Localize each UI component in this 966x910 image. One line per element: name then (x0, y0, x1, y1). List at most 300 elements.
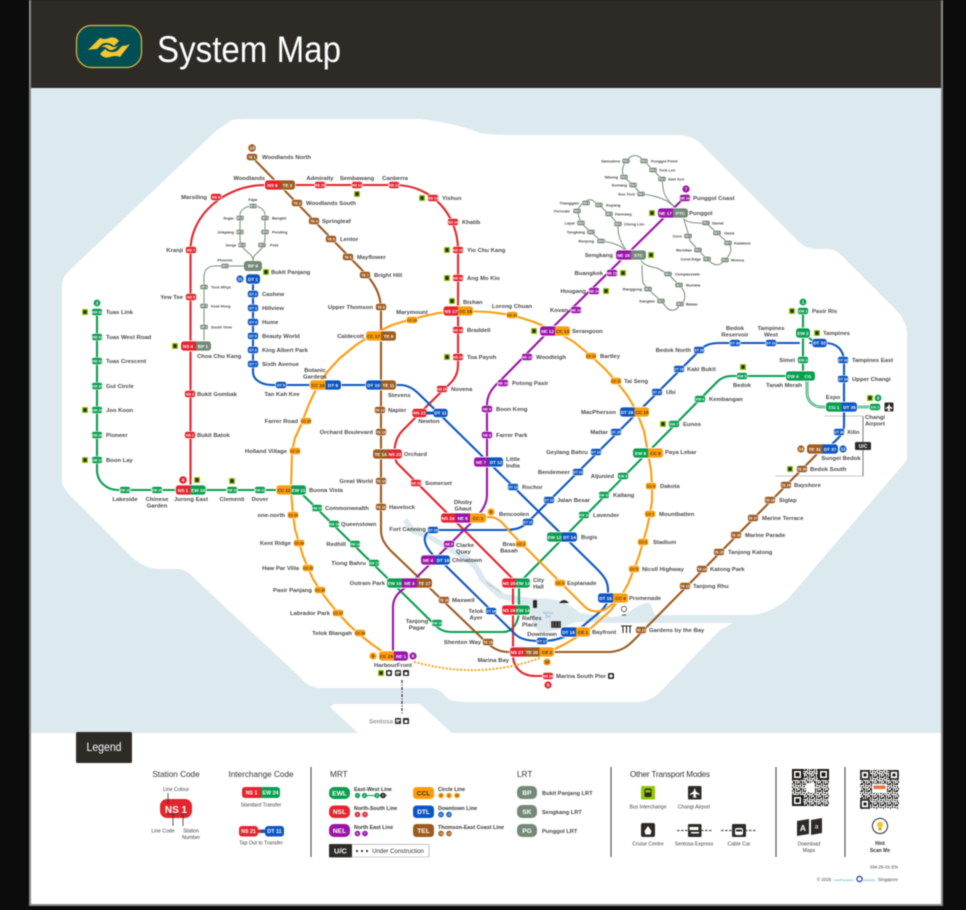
Newton: Newton (418, 419, 440, 425)
Raffles Place: NS 26 (503, 608, 516, 613)
Changi Airport: Airport (865, 421, 885, 427)
Tampines (795, 328, 851, 338)
Woodlands South: Woodlands South (306, 201, 356, 207)
Interchange Code legend: Interchange Code (228, 770, 294, 779)
Gul Circle: EW 30 (92, 384, 102, 388)
Tuas Crescent (92, 358, 146, 365)
Punggol LRT stations: PE 5 (725, 242, 731, 245)
NS stations group (160, 176, 614, 680)
Sungei Bedok: TE 31 (809, 447, 821, 452)
Bedok Reservoir (721, 326, 749, 346)
Tanah Merah (766, 370, 816, 389)
Stevens: TE 11 (382, 383, 395, 388)
NEL entry (329, 824, 393, 837)
Bukit Panjang LRT stations: Teck Whye (211, 284, 232, 290)
NSL entry: 5 (364, 813, 366, 817)
Sengkang: NE 16 (617, 253, 630, 258)
QR code: hint (860, 770, 899, 809)
Bedok Reservoir: Bedok (726, 326, 744, 332)
Lakeside (112, 486, 138, 503)
badge CCL 9 (369, 652, 377, 660)
Bukit Panjang LRT stations: BP 7 (259, 244, 265, 247)
Bukit Panjang (245, 269, 311, 284)
copyright line: LandTransport (834, 878, 854, 882)
Boon Keng: NE 9 (483, 407, 491, 411)
Katong Park: TE 24 (697, 567, 707, 571)
Bendemeer: Bendemeer (538, 470, 571, 476)
Punggol LRT stations: Oasis (724, 230, 735, 236)
Xilin: DT 36 (834, 430, 844, 434)
Sengkang LRT stations: Compassvale (675, 272, 701, 276)
Marsiling: NS 8 (212, 195, 220, 199)
Telok Ayer: Ayer (470, 616, 483, 622)
Bedok South: Bedok South (810, 467, 847, 473)
Farrer Park (482, 432, 528, 439)
landmark: Gardens by the Bay (621, 626, 632, 633)
Bayshore: TE 29 (781, 483, 791, 487)
Marina Bay: TE 20 (526, 650, 539, 655)
Outram Park (350, 578, 433, 588)
Marina Bay: NS 27 (511, 650, 524, 655)
Hillview: Hillview (262, 306, 284, 312)
Yishun: Yishun (442, 196, 462, 202)
Clementi: EW 23 (227, 488, 237, 492)
Lorong Chuan: Lorong Chuan (492, 304, 533, 310)
Bukit Panjang LRT stations: BP 3 (201, 305, 207, 308)
Tuas Link: EW 33 (92, 310, 102, 314)
Farrer Road: Farrer Road (265, 419, 298, 425)
Lentor: Lentor (340, 237, 359, 243)
Bishan: CC 15 (459, 309, 472, 314)
Braddell (452, 326, 491, 334)
Potong Pasir (498, 380, 549, 387)
Redhill: Redhill (326, 542, 346, 548)
Geylang Bahru: Geylang Bahru (546, 450, 588, 456)
Sengkang LRT line (577, 200, 685, 310)
Holland Village: CC 21 (290, 449, 300, 453)
Bedok South: TE 30 (797, 467, 807, 471)
Sengkang: STC (634, 253, 644, 258)
Bright Hill: Bright Hill (374, 273, 403, 279)
Redhill (326, 540, 360, 548)
Commonwealth: Commonwealth (325, 506, 369, 512)
Sengkang LRT stations: SE 2 (676, 284, 682, 287)
Expo (825, 395, 858, 412)
Sentosa label and icons: Sentosa (369, 718, 394, 726)
Marina South Pier: NS 28 (543, 674, 553, 678)
Farrer Road (265, 418, 312, 425)
Pasir Panjang: Pasir Panjang (273, 588, 312, 594)
Gardens by the Bay: TE 22 (636, 628, 646, 632)
badge NSL 5: 5 (547, 683, 550, 688)
Mattar (590, 428, 622, 436)
icon and label: Download Maps: A (800, 823, 806, 833)
Punggol LRT stations: PE 1 (685, 235, 691, 238)
Serangoon (531, 326, 603, 336)
Promenade: CC 4 (615, 596, 626, 601)
Stadium: Stadium (653, 540, 676, 546)
Boon Keng: Boon Keng (496, 407, 528, 413)
Somerset: NS 23 (411, 481, 421, 485)
badge TEL 14: 14 (798, 447, 804, 452)
Redhill: EW 18 (350, 542, 360, 546)
PG entry (517, 824, 578, 837)
Kovan: NE 13 (571, 308, 581, 312)
Paya Lebar: Paya Lebar (665, 450, 697, 456)
Dover: Dover (252, 497, 269, 503)
Woodlands: NS 9 (267, 183, 278, 188)
Great World (339, 478, 386, 485)
Tiong Bahru (331, 560, 380, 567)
Sungei Bedok: Sungei Bedok (821, 456, 861, 462)
Sungei Bedok (806, 444, 861, 462)
Bukit Batok: Bukit Batok (197, 433, 230, 439)
SK entry (517, 805, 582, 818)
Bukit Panjang LRT stations: BP 12 (237, 231, 244, 234)
Dhoby Ghaut: Dhoby (454, 500, 472, 506)
Kaki Bukit: Kaki Bukit (687, 367, 716, 373)
Yio Chu Kang: Yio Chu Kang (467, 248, 506, 254)
Upper Thomson: Upper Thomson (328, 305, 373, 311)
copyright line: Singapore (878, 877, 899, 882)
Great World: TE 15 (376, 479, 386, 483)
Bugis: EW 12 (548, 535, 562, 540)
Chinatown: Chinatown (452, 558, 483, 564)
Marine Terrace: Marine Terrace (762, 516, 804, 522)
Tan Kah Kee: Tan Kah Kee (264, 392, 300, 398)
Esplanade: CC 3 (556, 581, 564, 585)
Bukit Panjang LRT stations: BP 11 (237, 217, 244, 220)
Ubi (652, 388, 676, 396)
copyright line: Authority (863, 878, 876, 882)
Nicoll Highway: CC 5 (630, 567, 638, 571)
Under Construction entry (329, 844, 429, 857)
Buona Vista (276, 484, 344, 496)
Napier: TE 12 (375, 408, 385, 412)
Punggol LRT stations: PE 7 (703, 222, 709, 225)
Cashew (248, 290, 285, 298)
Woodleigh: NE 11 (522, 355, 532, 359)
Kent Ridge: Kent Ridge (260, 541, 292, 547)
Punggol LRT stations: PW 1 (659, 178, 666, 181)
Raffles Place: Raffles (522, 616, 542, 622)
Sengkang LRT stations: SW 5 (574, 210, 581, 213)
Interchange Code legend: NS 1 (246, 791, 257, 797)
City Hall (501, 578, 545, 591)
U/C tag: U/C (859, 444, 868, 450)
badge TEL 13: 13 (249, 146, 255, 151)
Chinese Garden: EW 25 (152, 488, 162, 492)
Hume (248, 318, 279, 326)
Pasir Ris (789, 308, 838, 315)
Queenstown (328, 520, 377, 528)
Buangkok: Buangkok (575, 271, 604, 277)
Kranji: Kranji (166, 248, 183, 254)
DTL entry: 11 (439, 813, 443, 817)
Queenstown: Queenstown (341, 522, 377, 528)
LRT legend (517, 770, 593, 837)
one-north: one-north (258, 513, 285, 519)
TEL entry: 13 (439, 832, 443, 836)
badge NEL 6: 6 (412, 654, 415, 659)
Dover (252, 486, 269, 503)
Punggol LRT stations: PE 4 (722, 259, 728, 262)
EW stations group (82, 308, 894, 632)
Tanjong Pagar: Tanjong (406, 619, 428, 625)
label: Marina Bay: Bay (545, 615, 551, 619)
Telok Ayer: Telok (469, 609, 483, 615)
BP entry (517, 786, 593, 799)
Mattar: DT 25 (611, 430, 621, 434)
Yio Chu Kang: NS 15 (453, 248, 463, 252)
badge DTL 12 (839, 445, 847, 453)
Ubi: Ubi (666, 390, 676, 396)
Havelock (376, 504, 416, 511)
Toa Payoh: Toa Payoh (467, 355, 497, 361)
HarbourFront: NE 1 (396, 654, 407, 659)
Punggol Coast (680, 194, 735, 202)
TEL entry: TEL (417, 828, 430, 835)
icon and label: Hint Scan Me: Hint (875, 841, 885, 847)
Newton: NS 21 (413, 411, 426, 416)
Other Transport Modes legend: Other Transport Modes (630, 770, 710, 779)
Bukit Panjang: Bukit Panjang (271, 270, 311, 276)
Clarke Quay: Quay (456, 550, 471, 556)
Raffles Place: EW 14 (516, 608, 530, 613)
Lakeside: Lakeside (112, 497, 138, 503)
Bayshore (780, 482, 822, 489)
Punggol LRT stations: Kadaloor (734, 240, 751, 246)
Tampines: Tampines (823, 331, 851, 337)
Bukit Panjang LRT stations: Senja (226, 242, 237, 248)
Mayflower: TE 6 (344, 255, 352, 259)
Tuas Link: Tuas Link (106, 310, 134, 316)
Joo Koon: EW 29 (92, 408, 102, 412)
Buona Vista: Buona Vista (309, 488, 344, 494)
NEL entry: NEL (333, 828, 346, 835)
Tanah Merah: EW 4 (787, 374, 799, 379)
Pioneer (92, 432, 128, 439)
Sembawang: NS 11 (352, 183, 362, 187)
Holland Village (245, 448, 300, 455)
header bar (31, 0, 941, 88)
Somerset (410, 480, 452, 487)
Lorong Chuan: CC 14 (507, 313, 517, 317)
Aljunied: EW 9 (619, 474, 627, 478)
Dhoby Ghaut: Ghaut (454, 507, 472, 513)
SK entry: SK (522, 809, 532, 816)
Tanjong Katong (714, 548, 773, 556)
City Hall: EW 13 (516, 581, 530, 586)
Khatib: NS 14 (448, 220, 458, 224)
badge EWL 2: 2 (96, 301, 99, 306)
Bukit Panjang LRT stations: Segar (223, 216, 234, 220)
Tiong Bahru: EW 17 (369, 561, 379, 565)
Canberra: NS 12 (389, 183, 399, 187)
Haw Par Villa (262, 564, 314, 572)
Outram Park: Outram Park (350, 581, 386, 587)
Nicoll Highway (628, 566, 685, 573)
Tampines East: Tampines East (852, 358, 893, 364)
Outram Park: EW 16 (388, 581, 402, 586)
Punggol LRT stations: Nibong (605, 174, 619, 180)
badge NSL 4 (179, 476, 187, 484)
Bishan: NS 17 (445, 309, 458, 314)
Bedok: EW 5 (738, 374, 746, 378)
Interchange Code legend: NS 21 (241, 829, 256, 835)
Station Code legend: Station Code (152, 770, 200, 779)
Toa Payoh: NS 19 (453, 355, 463, 359)
badge NEL 7 (682, 185, 690, 193)
Buona Vista: EW 21 (292, 488, 306, 493)
EWL entry: 2 (364, 794, 366, 798)
Sentosa Express dash line (401, 680, 403, 715)
Tanjong Katong: Tanjong Katong (728, 550, 773, 556)
Woodlands North: Woodlands North (262, 155, 311, 161)
Outram Park: TE 17 (418, 581, 431, 586)
Tai Seng (610, 378, 649, 385)
Tampines West: West (764, 333, 778, 339)
Canberra: Canberra (382, 176, 409, 182)
Tampines DT: DT 32 (813, 341, 826, 346)
Woodlands North (246, 154, 311, 161)
Tanjong Pagar (406, 619, 442, 632)
Mountbatten: Mountbatten (659, 512, 695, 518)
NSL entry: 4 (357, 813, 359, 817)
Bartley (586, 352, 621, 360)
Tampines DT (812, 338, 827, 348)
Outram Park: NE 3 (404, 581, 415, 586)
Promenade: Promenade (629, 596, 662, 602)
Downtown line stations group (245, 269, 893, 644)
Bukit Panjang LRT stations: BP 10 (250, 205, 257, 208)
Newton (412, 408, 448, 425)
Sengkang LRT stations: SE 3 (677, 303, 683, 306)
badge DTL 11: 11 (238, 277, 243, 282)
Station Code legend: Line Code (151, 828, 175, 834)
Expo: Expo (826, 395, 841, 401)
Clementi: Clementi (220, 497, 245, 503)
badge TEL 13 (248, 144, 256, 152)
Tanjong Rhu: TE 23 (680, 584, 690, 588)
Interchange Code legend: Standard Transfer (241, 803, 282, 809)
Clementi (220, 478, 245, 503)
badge CCL 8: 8 (490, 510, 493, 515)
Punggol LRT stations: Sumang (612, 182, 628, 188)
Punggol LRT stations: Punggol Point (651, 158, 678, 164)
Farrer Park: Farrer Park (496, 433, 528, 439)
Pasir Ris: Pasir Ris (812, 309, 838, 315)
MRT legend (329, 770, 504, 857)
Mayflower (342, 254, 387, 261)
Woodlands South (292, 200, 356, 207)
DTL entry: DTL (417, 809, 430, 816)
Admiralty (306, 176, 334, 188)
Fort Canning: Fort Canning (389, 527, 426, 533)
Marina South Pier: Marina South Pier (556, 674, 607, 680)
Sengkang (585, 250, 654, 260)
Tiong Bahru: Tiong Bahru (331, 561, 366, 567)
Tuas West Road: EW 32 (92, 335, 102, 339)
Bugis (546, 532, 598, 542)
Caldecott: Caldecott (337, 334, 364, 340)
Joo Koon (82, 406, 134, 414)
icon and label: Download Maps: Download (798, 842, 820, 848)
Sixth Avenue (248, 360, 300, 368)
Boon Lay (82, 456, 134, 464)
Interchange Code legend: Tap Out to Transfer (239, 841, 283, 847)
landmark: Marina Bay Sands (551, 621, 561, 628)
Bukit Panjang LRT stations: BP 6 (248, 264, 259, 269)
Bendemeer (538, 468, 584, 476)
Orchard Boulevard (320, 428, 386, 436)
Kallang: EW 10 (599, 493, 609, 497)
Beauty World: DT 5 (249, 334, 257, 338)
EWL entry: 3 (376, 794, 378, 798)
Punggol LRT stations: Cove (672, 234, 683, 238)
Haw Par Villa: CC 25 (303, 566, 313, 570)
Punggol LRT stations: PW 4 (623, 160, 630, 163)
Lavender (578, 512, 620, 519)
Boon Lay: EW 27 (92, 458, 102, 462)
NEL entry: 6 (357, 832, 359, 836)
Woodlands: TE 2 (283, 183, 293, 188)
Novena: Novena (451, 387, 473, 393)
TEL entry: 14 (447, 832, 451, 836)
Bayfront: CE 1 (578, 630, 589, 635)
City Hall: City (533, 578, 544, 584)
Downtown: DT 17 (537, 639, 547, 643)
Springleaf: Springleaf (322, 219, 351, 225)
Kent Ridge (260, 540, 304, 547)
Changi Airport: Changi (865, 415, 885, 421)
Bright Hill: TE 7 (361, 273, 369, 277)
icon: bus interchange: Bus Interchange (629, 804, 667, 810)
Promenade (597, 592, 662, 604)
badge EWL 1: 1 (802, 300, 805, 305)
North East line (393, 195, 687, 656)
Hume: DT 4 (249, 320, 257, 324)
Woodlands (233, 176, 296, 190)
Sembawang (340, 176, 375, 197)
King Albert Park: DT 6 (249, 348, 257, 352)
PG entry: PG (522, 828, 532, 835)
Bukit Gombak: NS 3 (186, 392, 194, 396)
DTL entry: 12 (447, 813, 451, 817)
Lakeside: EW 26 (120, 488, 130, 492)
King Albert Park: King Albert Park (262, 348, 309, 354)
Tai Seng: CC 11 (611, 379, 621, 383)
Punggol LRT stations: Samudera (601, 158, 621, 164)
Tampines West (757, 326, 785, 346)
Woodlands North: TE 1 (248, 155, 256, 159)
Changi Airport: CG 2 (871, 405, 879, 409)
Downtown (527, 632, 557, 644)
one-north (258, 512, 298, 519)
Interchange Code legend: DT 11 (267, 829, 282, 835)
Paya Lebar: EW 8 (635, 451, 647, 456)
Marine Parade: Marine Parade (745, 533, 786, 539)
Bencoolen: DT 21 (523, 520, 533, 524)
Chinatown: DT 19 (437, 558, 450, 563)
Bras Basah: Bras (502, 542, 516, 548)
Choa Chu Kang: BP 1 (198, 344, 209, 349)
Bukit Panjang LRT stations (200, 197, 288, 330)
NEL entry: 7 (364, 832, 366, 836)
Xilin (834, 428, 860, 436)
Ang Mo Kio (444, 274, 500, 282)
Kallang (598, 492, 635, 499)
